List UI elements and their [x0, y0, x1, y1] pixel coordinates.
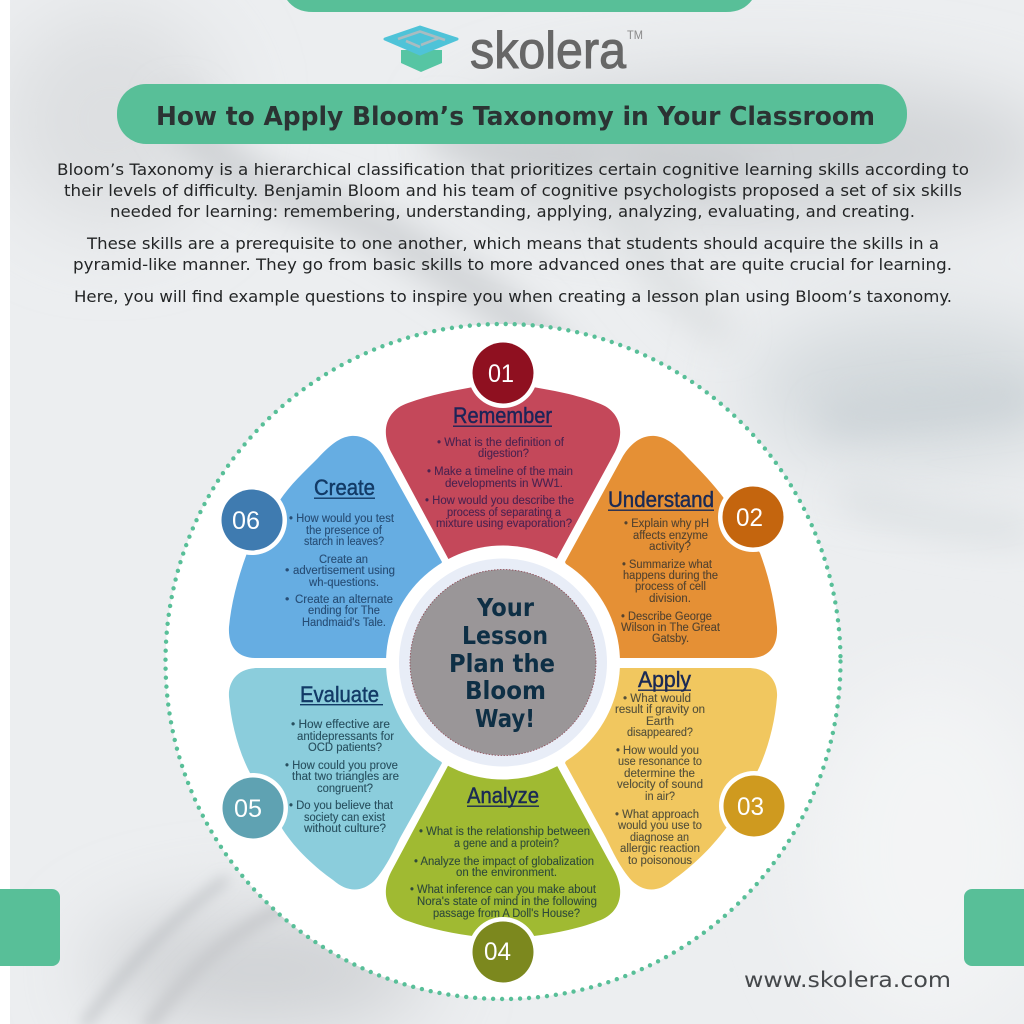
questions: Remember: mixture using evaporation? [436, 516, 572, 530]
questions: Create: • How would you test [289, 511, 395, 525]
questions: Evaluate: • How could you prove [285, 758, 398, 772]
shape: analyze [386, 762, 620, 937]
number badge 03 [719, 771, 789, 841]
intro paragraphs: Bloom’s Taxonomy is a hierarchical classification that prioritizes certain cognitive learning skills according to [57, 160, 969, 179]
questions: Apply: to poisonous [628, 853, 692, 867]
shape: understand [565, 436, 777, 658]
center badge: Your [476, 593, 535, 622]
questions: Apply: allergic reaction [620, 841, 700, 855]
questions: Apply: would you use to [617, 818, 702, 832]
center badge: Bloom [465, 676, 546, 705]
questions: Evaluate: without culture? [303, 821, 386, 835]
questions: Apply: Earth [646, 714, 674, 728]
questions: Analyze: on the environment. [456, 865, 557, 879]
questions: Understand: • Summarize what [622, 557, 712, 571]
heading: Understand: Understand [608, 487, 714, 512]
questions: Apply [615, 691, 705, 867]
questions: Understand: affects enzyme [633, 528, 708, 542]
title banner [117, 84, 907, 144]
questions: Analyze: Nora's state of mind in the following [417, 894, 597, 908]
questions: Create [285, 511, 395, 629]
questions: Apply: • What approach [615, 807, 699, 821]
questions: Understand: process of cell [635, 579, 706, 593]
questions: Analyze: • What is the relationship between [419, 824, 590, 838]
questions: Remember: • What is the definition of [437, 435, 565, 449]
wordmark: skolera [470, 22, 626, 80]
intro paragraphs: Here, you will find example questions to inspire you when creating a lesson plan using Bloom’s taxonomy. [74, 287, 952, 306]
questions: Apply: velocity of sound [617, 777, 703, 791]
questions: Remember: process of separating a [447, 505, 561, 519]
questions: Create: the presence of [306, 523, 382, 537]
questions: Analyze: • What inference can you make about [410, 882, 596, 896]
number badge 03: 03 [737, 793, 764, 821]
section 06: Create [217, 475, 395, 629]
questions: Create: Create an [319, 552, 368, 566]
questions: Remember [425, 435, 574, 530]
questions: Understand: Wilson in The Great [621, 620, 721, 634]
questions: Create: Create an alternate [295, 592, 393, 606]
questions: Remember: • How would you describe the [425, 493, 574, 507]
top green bar [287, 0, 752, 12]
left green block [0, 889, 60, 966]
intro paragraphs [57, 160, 969, 306]
section 04: Analyze [410, 783, 597, 987]
questions: Analyze: passage from A Doll's House? [433, 906, 580, 920]
questions: Create: advertisement using [293, 563, 395, 577]
shape: evaluate [229, 668, 442, 890]
questions: Create: • [285, 563, 289, 577]
number badge 04: 04 [484, 938, 511, 966]
heading: Apply: Apply [638, 667, 691, 692]
questions: Apply: • What would [623, 691, 691, 705]
questions: Remember: • Make a timeline of the main [427, 464, 573, 478]
number badge 02 [718, 482, 788, 552]
right green block [964, 889, 1024, 966]
questions: Understand [621, 516, 721, 645]
section 05: Evaluate [218, 682, 399, 843]
number badge 05 [218, 773, 288, 843]
petal shapes [229, 386, 777, 937]
intro paragraphs: needed for learning: remembering, understanding, applying, analyzing, evaluating, and creating. [110, 202, 915, 221]
center badge: Lesson [462, 621, 548, 650]
questions: Evaluate: society can exist [304, 810, 385, 824]
section 01: Remember [425, 338, 574, 530]
section 03: Apply [615, 667, 789, 867]
center badge: Way! [475, 704, 535, 733]
questions: Analyze: • Analyze the impact of globalization [414, 854, 594, 868]
questions: Apply: diagnose an [630, 830, 689, 844]
shape: create [229, 436, 442, 658]
questions: Understand: division. [649, 591, 691, 605]
logo: skolera [385, 22, 643, 80]
shape: remember [386, 386, 620, 562]
heading: Analyze: Analyze [467, 783, 539, 808]
questions: Remember: developments in WW1. [445, 476, 563, 490]
questions: Apply: result if gravity on [615, 702, 705, 716]
questions: Apply: determine the [624, 766, 695, 780]
number badge 04 [468, 917, 538, 987]
questions: Create: starch in leaves? [304, 534, 384, 548]
questions: Understand: Gatsby. [652, 631, 689, 645]
questions: Understand: happens during the [623, 568, 718, 582]
intro paragraphs: their levels of difficulty. Benjamin Bloom and his team of cognitive psychologists proposed a set of six skills [64, 181, 962, 200]
number badge 05: 05 [234, 795, 262, 823]
questions: Apply: disappeared? [627, 725, 693, 739]
questions: Apply: use resonance to [618, 754, 702, 768]
trademark: TM [627, 30, 643, 42]
intro paragraphs: pyramid-like manner. They go from basic skills to more advanced ones that are quite crucial for learning. [73, 255, 952, 274]
heading: Evaluate: Evaluate [300, 682, 379, 707]
intro paragraphs: These skills are a prerequisite to one another, which means that students should acquire the skills in a [86, 234, 939, 253]
shape: apply [565, 668, 777, 890]
questions: Remember: digestion? [478, 446, 529, 460]
questions: Create: wh-questions. [308, 575, 379, 589]
heading: Create: Create [314, 475, 375, 500]
questions: Apply: • How would you [616, 743, 699, 757]
icon: graduation cap [385, 27, 457, 72]
questions: Analyze [410, 824, 597, 920]
questions: Understand: activity? [649, 539, 691, 553]
questions: Analyze: a gene and a protein? [454, 836, 559, 850]
questions: Evaluate: that two triangles are [292, 769, 399, 783]
questions: Evaluate: congruent? [317, 781, 373, 795]
questions: Evaluate: antidepressants for [297, 729, 394, 743]
questions: Evaluate: • Do you believe that [289, 798, 394, 812]
questions: Create: ending for The [308, 603, 380, 617]
number badge 06: 06 [232, 507, 260, 535]
section 02: Understand [608, 482, 788, 645]
number badge 01 [468, 338, 538, 408]
center badge: Plan the [449, 649, 555, 678]
questions: Understand: • Explain why pH [624, 516, 709, 530]
questions: Evaluate: OCD patients? [308, 740, 382, 754]
questions: Apply: in air? [645, 789, 675, 803]
questions: Create: • [285, 592, 289, 606]
heading: Remember: Remember [453, 403, 552, 428]
title banner: How to Apply Bloom’s Taxonomy in Your Classroom [156, 102, 875, 132]
white dial with dotted border [166, 324, 840, 999]
website url: www.skolera.com [744, 968, 951, 992]
number badge 02: 02 [736, 504, 763, 532]
questions: Understand: • Describe George [621, 609, 712, 623]
center badge [386, 546, 620, 780]
number badge 01: 01 [488, 360, 514, 388]
questions: Create: Handmaid's Tale. [302, 615, 386, 629]
questions: Evaluate [285, 717, 399, 835]
number badge 06 [217, 485, 287, 555]
questions: Evaluate: • How effective are [291, 717, 390, 731]
